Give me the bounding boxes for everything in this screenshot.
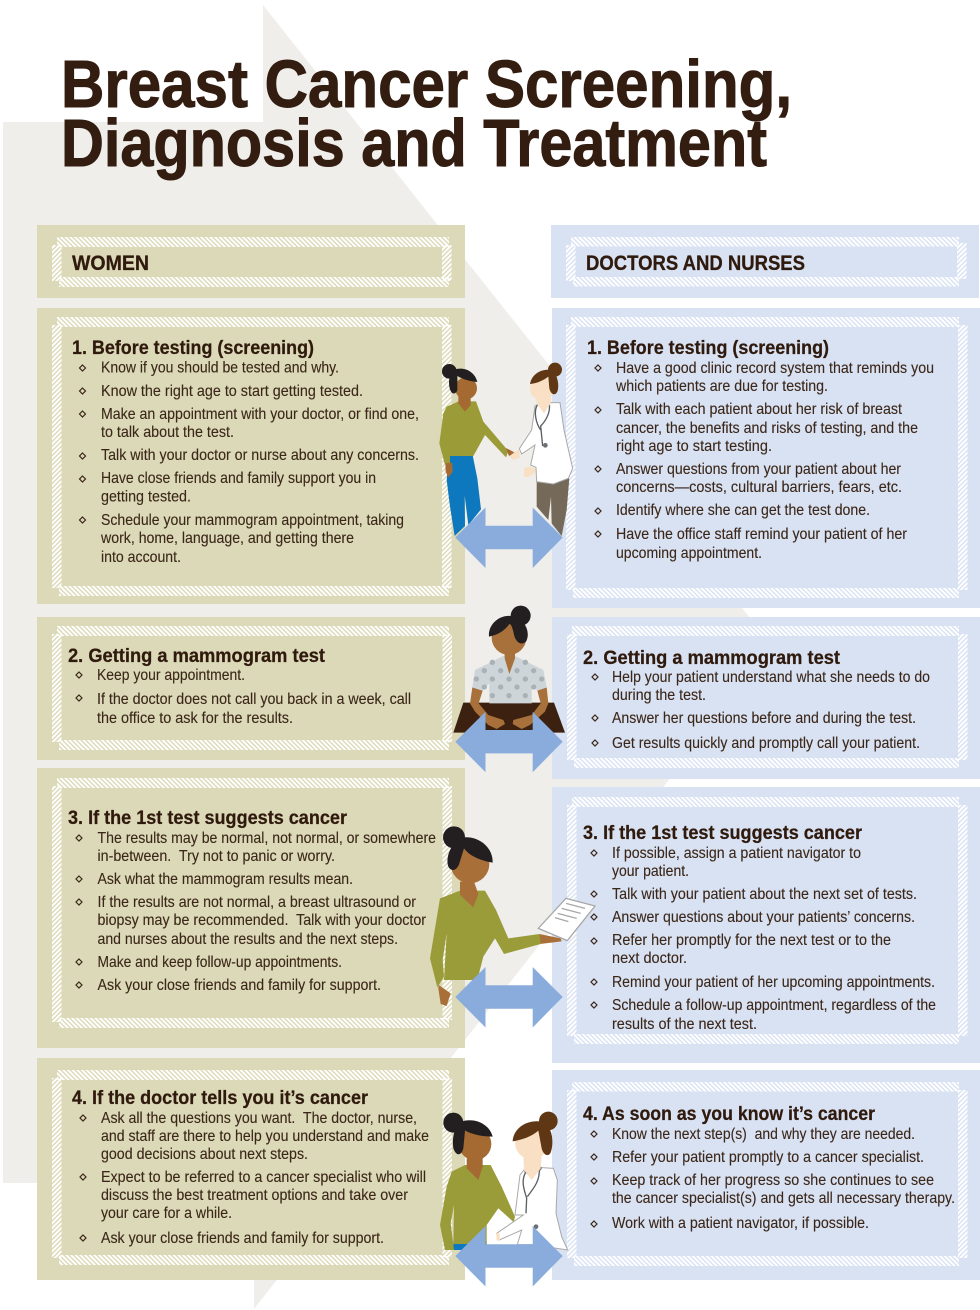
bullet list: doctors step 2: Answer her questions before and during the test. bbox=[612, 710, 916, 727]
bullet list: doctors step 3: Talk with your patient about the next set of tests. bbox=[612, 886, 917, 903]
illustration: woman holding results paper bbox=[430, 826, 595, 1006]
bullet list: women step 3: Ask what the mammogram results mean. bbox=[98, 871, 353, 888]
bullet list: doctors step 3: results of the next test. bbox=[612, 1016, 757, 1033]
bullet list: women step 4: discuss the best treatment options and take over bbox=[101, 1187, 409, 1204]
panel: doctors step 4 bbox=[552, 1070, 980, 1280]
bullet list: women step 3: in-between. Try not to panic or worry. bbox=[98, 848, 335, 865]
title: Breast Cancer Screening, bbox=[61, 47, 792, 122]
heading: women step 2: 2. Getting a mammogram test bbox=[68, 646, 326, 667]
bullet list: doctors step 1: Have a good clinic record system that reminds you bbox=[616, 360, 934, 377]
bullet list: women step 4 bbox=[80, 1110, 429, 1247]
bullet list: women step 4: Ask your close friends and family for support. bbox=[101, 1230, 384, 1247]
bullet list: doctors step 4: Refer your patient promptly to a cancer specialist. bbox=[612, 1149, 924, 1166]
bullet list: doctors step 1: Answer questions from your patient about her bbox=[616, 461, 902, 478]
title: Diagnosis and Treatment bbox=[61, 106, 767, 181]
bullet list: doctors step 4: Work with a patient navigator, if possible. bbox=[612, 1215, 869, 1232]
bullet list: doctors step 3: your patient. bbox=[612, 863, 689, 880]
bullet list: women step 4: Ask all the questions you want. The doctor, nurse, bbox=[101, 1110, 417, 1127]
bullet list: women step 3: The results may be normal, not normal, or somewhere bbox=[98, 830, 436, 847]
panel: women step 2 bbox=[37, 617, 465, 760]
bullet list: doctors step 3: Schedule a follow-up appointment, regardless of the bbox=[612, 997, 936, 1014]
bullet list: doctors step 4: Know the next step(s) and why they are needed. bbox=[612, 1126, 915, 1143]
bullet list: women step 2: the office to ask for the results. bbox=[97, 710, 293, 727]
bullet list: women step 2: Keep your appointment. bbox=[97, 667, 245, 684]
bullet list: doctors step 1: upcoming appointment. bbox=[616, 545, 762, 562]
bullet list: doctors step 3: If possible, assign a patient navigator to bbox=[612, 845, 861, 862]
panel: women step 1 bbox=[37, 308, 465, 604]
bullet list: doctors step 2 bbox=[592, 669, 930, 752]
bullet list: doctors step 1 bbox=[595, 360, 934, 562]
title bbox=[61, 47, 792, 181]
arrow: two-way, step 1 bbox=[455, 508, 563, 568]
bullet list: women step 3: Ask your close friends and family for support. bbox=[98, 977, 381, 994]
illustration: woman and doctor shaking hands bbox=[439, 363, 573, 536]
bullet list: women step 3 bbox=[76, 830, 436, 994]
panel: women step 3 bbox=[37, 768, 465, 1048]
bullet list: doctors step 3: next doctor. bbox=[612, 950, 687, 967]
panel: women step 4 bbox=[37, 1058, 465, 1280]
heading: women: WOMEN bbox=[72, 251, 149, 275]
bullet list: women step 3: Make and keep follow-up appointments. bbox=[98, 954, 342, 971]
background arrow shape bbox=[3, 5, 773, 1309]
heading: doctors step 3: 3. If the 1st test suggests cancer bbox=[583, 823, 863, 844]
bullet list: women step 2: If the doctor does not call you back in a week, call bbox=[97, 691, 411, 708]
bullet list: doctors step 1: Talk with each patient about her risk of breast bbox=[616, 401, 902, 418]
panel: doctors step 2 bbox=[552, 617, 980, 779]
bullet list: women step 1: into account. bbox=[101, 549, 181, 566]
illustration: woman with doctor comforting her bbox=[440, 1112, 568, 1250]
bullet list: women step 3: and nurses about the results and the next steps. bbox=[98, 931, 398, 948]
bullet list: doctors step 1: Identify where she can get the test done. bbox=[616, 502, 870, 519]
bullet list: women step 1: to talk about the test. bbox=[101, 424, 234, 441]
bullet list: women step 3: biopsy may be recommended. Talk with your doctor bbox=[98, 912, 427, 929]
bullet list: women step 1: Schedule your mammogram appointment, taking bbox=[101, 512, 404, 529]
arrow: two-way, step 4 bbox=[455, 1226, 563, 1286]
panel: women header bbox=[37, 225, 465, 298]
bullet list: doctors step 1: which patients are due for testing. bbox=[615, 378, 828, 395]
heading: women step 3: 3. If the 1st test suggests cancer bbox=[68, 808, 348, 829]
bullet list: doctors step 4: Keep track of her progress so she continues to see bbox=[612, 1172, 934, 1189]
bullet list: women step 1: Know if you should be tested and why. bbox=[101, 360, 339, 376]
bullet list: women step 4: and staff are there to help you understand and make bbox=[101, 1128, 429, 1145]
bullet list: women step 1: Know the right age to start getting tested. bbox=[101, 383, 363, 400]
bullet list: doctors step 3: Refer her promptly for the next test or to the bbox=[612, 932, 891, 949]
bullet list: doctors step 2: Help your patient understand what she needs to do bbox=[612, 669, 930, 686]
heading: women step 1: 1. Before testing (screening) bbox=[72, 338, 314, 359]
bullet list: doctors step 3 bbox=[591, 845, 936, 1033]
bullet list: doctors step 2: Get results quickly and promptly call your patient. bbox=[612, 735, 920, 752]
bullet list: women step 3: If the results are not normal, a breast ultrasound or bbox=[98, 894, 417, 911]
bullet list: women step 1: Have close friends and family support you in bbox=[101, 470, 376, 487]
bullet list: women step 4: Expect to be referred to a cancer specialist who will bbox=[101, 1169, 426, 1186]
heading: doctors step 1: 1. Before testing (screening) bbox=[587, 338, 829, 359]
bullet list: women step 1: Talk with your doctor or nurse about any concerns. bbox=[101, 447, 419, 464]
bullet list: women step 1: work, home, language, and getting there bbox=[100, 530, 354, 547]
panel: doctors step 3 bbox=[552, 787, 980, 1063]
bullet list: doctors step 3: Remind your patient of her upcoming appointments. bbox=[612, 974, 935, 991]
bullet list: women step 4: good decisions about next steps. bbox=[101, 1146, 308, 1163]
bullet list: doctors step 3: Answer questions about your patients’ concerns. bbox=[612, 909, 915, 926]
heading: women step 4: 4. If the doctor tells you it’s cancer bbox=[72, 1088, 369, 1109]
bullet list: doctors step 2: during the test. bbox=[612, 687, 706, 704]
bullet list: doctors step 4 bbox=[591, 1126, 955, 1232]
panel: doctors step 1 bbox=[552, 308, 980, 608]
bullet list: women step 4: your care for a while. bbox=[101, 1205, 232, 1222]
arrow: two-way, step 2 bbox=[455, 712, 563, 772]
illustration: woman at table bbox=[453, 606, 565, 733]
bullet list: women step 1: Make an appointment with your doctor, or find one, bbox=[101, 406, 419, 423]
bullet list: women step 1 bbox=[80, 360, 419, 566]
bullet list: doctors step 1: concerns—costs, cultural barriers, fears, etc. bbox=[616, 479, 902, 496]
bullet list: doctors step 1: cancer, the benefits and risks of testing, and the bbox=[616, 420, 918, 437]
arrow: two-way, step 3 bbox=[455, 967, 563, 1028]
panel: doctors and nurses header bbox=[551, 225, 979, 298]
bullet list: doctors step 1: Have the office staff remind your patient of her bbox=[616, 526, 908, 543]
heading: doctors step 4: 4. As soon as you know it’s cancer bbox=[583, 1104, 876, 1125]
bullet list: doctors step 1: right age to start testing. bbox=[616, 438, 772, 455]
heading: doctors step 2: 2. Getting a mammogram test bbox=[583, 648, 841, 669]
bullet list: women step 2 bbox=[76, 667, 411, 727]
bullet list: women step 1: getting tested. bbox=[101, 488, 191, 506]
heading: doctors and nurses: DOCTORS AND NURSES bbox=[586, 251, 805, 275]
